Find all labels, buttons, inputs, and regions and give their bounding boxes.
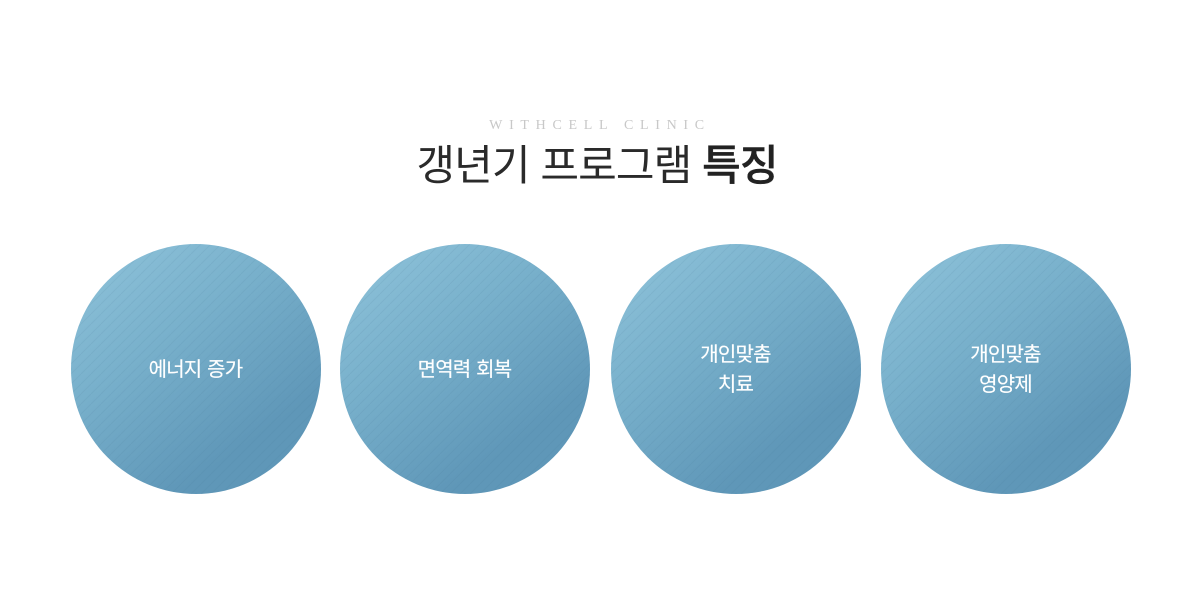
circle: personalized treatment: 개인맞춤 <box>700 344 771 366</box>
circle: personalized nutrition: 영양제 <box>979 374 1032 396</box>
title: 갱년기 프로그램 특징 <box>416 142 778 189</box>
eyebrow: clinic name: WITHCELL CLINIC <box>489 118 711 133</box>
circle: personalized nutrition <box>881 244 1131 494</box>
circle: personalized treatment <box>611 244 861 494</box>
circle: immunity recovery: 면역력 회복 <box>418 359 511 381</box>
circle: personalized nutrition: 개인맞춤 <box>970 344 1041 366</box>
circle: energy increase: 에너지 증가 <box>149 359 242 381</box>
circle: energy increase <box>71 244 321 494</box>
circle: personalized treatment: 치료 <box>718 374 753 396</box>
circle: immunity recovery <box>340 244 590 494</box>
